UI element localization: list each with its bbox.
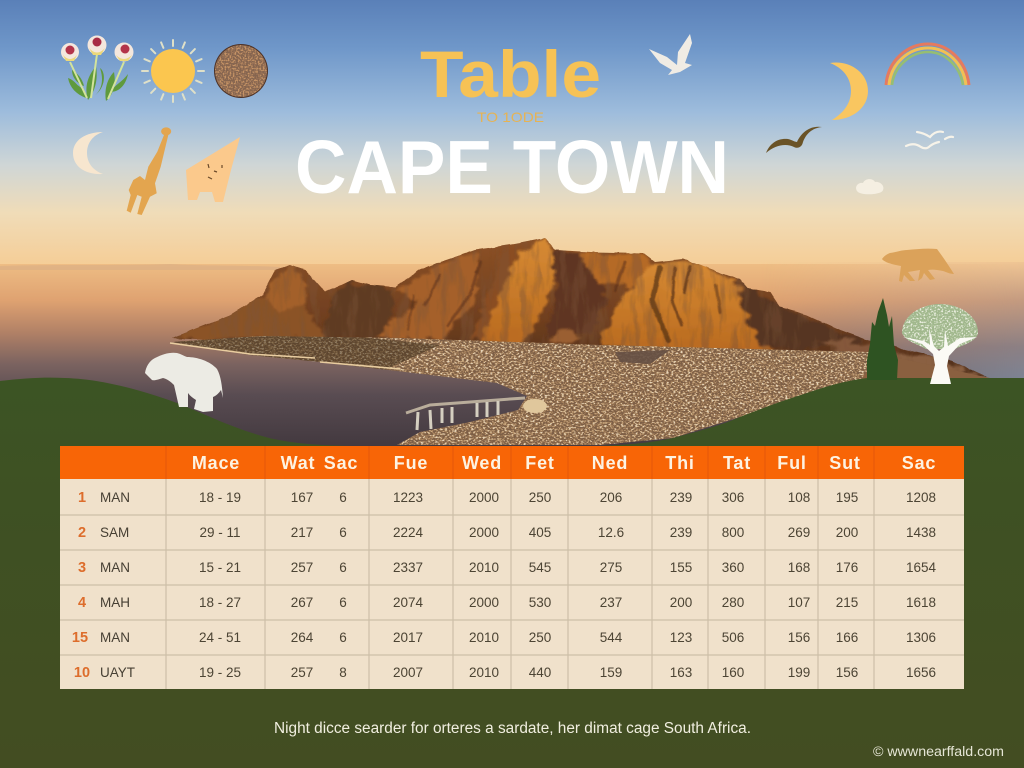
icon: rainbow <box>886 44 969 85</box>
sky background <box>0 0 1024 266</box>
icon: textured brown circle <box>214 44 268 98</box>
row 6: 8 <box>339 665 347 680</box>
row 6: 1656 <box>906 665 936 680</box>
row 1: 2000 <box>469 490 499 505</box>
green landscape <box>0 378 1024 768</box>
row 5: 544 <box>600 630 623 645</box>
icon: cypress tree <box>867 298 898 380</box>
row 1: 108 <box>788 490 810 505</box>
row 4: 2000 <box>469 595 499 610</box>
row 6 <box>74 665 936 681</box>
row 3: 2337 <box>393 560 423 575</box>
row 2: 6 <box>339 525 347 540</box>
row 3: 3 <box>78 560 86 576</box>
row 6: 159 <box>600 665 622 680</box>
small subtitle: TO 1ODE <box>477 109 544 125</box>
row 2: 29 - 11 <box>199 525 241 540</box>
row 4: MAH <box>100 595 130 610</box>
table header labels: Ful <box>777 453 807 473</box>
row 4: 215 <box>836 595 858 610</box>
icon: protea flowers <box>61 36 134 101</box>
footer caption: Night dicce searder for orteres a sardate, her dimat cage South Africa. <box>274 720 751 737</box>
table header labels: Wat <box>281 453 315 473</box>
table header labels: Thi <box>665 453 695 473</box>
row 6: 10 <box>74 665 90 681</box>
icon: rocket tower <box>127 127 171 215</box>
row 1: 1 <box>78 490 86 506</box>
row 5: 250 <box>529 630 551 645</box>
row 2 <box>78 525 936 541</box>
title line: Table: Table <box>420 37 601 111</box>
row 6: 156 <box>836 665 858 680</box>
table header labels: Tat <box>723 453 751 473</box>
row 3: 2010 <box>469 560 499 575</box>
icon: golden crescent moon <box>830 63 868 120</box>
row 2: 2224 <box>393 525 424 540</box>
row 5: 1306 <box>906 630 936 645</box>
row 2: 200 <box>836 525 858 540</box>
row 4: 18 - 27 <box>199 595 241 610</box>
row 3: 275 <box>600 560 622 575</box>
round harbour building <box>523 399 547 413</box>
table header labels: Sac <box>902 453 936 473</box>
table header labels: Fet <box>525 453 555 473</box>
icon: white baobab tree <box>902 304 978 384</box>
table header labels: Fue <box>394 453 428 473</box>
row 3: 545 <box>529 560 551 575</box>
data table <box>60 446 964 689</box>
row 2: 2000 <box>469 525 499 540</box>
icon: white dove <box>649 34 692 75</box>
row 3: 1654 <box>906 560 937 575</box>
row 1: 1223 <box>393 490 423 505</box>
row 4: 237 <box>600 595 622 610</box>
city of Cape Town <box>172 336 990 445</box>
table header labels <box>192 453 936 473</box>
row 2: SAM <box>100 525 129 540</box>
icon: walking animal silhouette <box>882 249 954 282</box>
row 4: 200 <box>670 595 692 610</box>
row 2: 1438 <box>906 525 936 540</box>
icon: small cloud <box>856 179 883 194</box>
table header background <box>60 446 964 479</box>
row 3 <box>78 560 937 576</box>
row 3: 155 <box>670 560 692 575</box>
icon: brown bird <box>766 127 822 153</box>
row 5 <box>72 630 936 646</box>
icon: paper house shape <box>186 137 240 202</box>
row 3: 168 <box>788 560 810 575</box>
row 5: 15 <box>72 630 88 646</box>
table header labels: Sut <box>829 453 861 473</box>
row 6: 2007 <box>393 665 423 680</box>
row 6: 199 <box>788 665 810 680</box>
row 1: 206 <box>600 490 622 505</box>
row 5: 156 <box>788 630 810 645</box>
table header labels: Mace <box>192 453 240 473</box>
row 4: 280 <box>722 595 744 610</box>
row 4: 2074 <box>393 595 424 610</box>
row 4: 267 <box>291 595 313 610</box>
row 4: 107 <box>788 595 810 610</box>
icon: white elephant <box>145 353 223 412</box>
row 4: 6 <box>339 595 347 610</box>
row 6: 2010 <box>469 665 499 680</box>
table header labels: Sac <box>324 453 358 473</box>
copyright: © wwwnearffald.com <box>873 744 1004 759</box>
row 1: 6 <box>339 490 347 505</box>
icon: sun <box>142 40 204 102</box>
row 2: 239 <box>670 525 692 540</box>
row 3: 6 <box>339 560 347 575</box>
row 2: 800 <box>722 525 744 540</box>
row 6: UAYT <box>100 665 135 680</box>
row 3: MAN <box>100 560 130 575</box>
row 1: 239 <box>670 490 692 505</box>
icon: white birds <box>906 132 953 148</box>
icon: pale crescent <box>73 132 103 174</box>
row 6: 163 <box>670 665 692 680</box>
row 2: 12.6 <box>598 525 624 540</box>
row 1 <box>78 490 936 506</box>
row 5: 6 <box>339 630 347 645</box>
row 5: 506 <box>722 630 744 645</box>
row 5: 166 <box>836 630 858 645</box>
harbour shoreline <box>170 343 400 369</box>
row 6: 160 <box>722 665 744 680</box>
row 3: 15 - 21 <box>199 560 241 575</box>
row 4: 530 <box>529 595 551 610</box>
row 1: 18 - 19 <box>199 490 241 505</box>
title <box>295 37 729 209</box>
row 6: 440 <box>529 665 551 680</box>
row 2: 405 <box>529 525 551 540</box>
row 5: MAN <box>100 630 130 645</box>
row 1: 1208 <box>906 490 936 505</box>
row 2: 2 <box>78 525 86 541</box>
row 5: 123 <box>670 630 692 645</box>
row 4: 4 <box>78 595 86 611</box>
row 5: 24 - 51 <box>199 630 241 645</box>
row 3: 176 <box>836 560 858 575</box>
row 5: 2010 <box>469 630 499 645</box>
table header labels: Wed <box>462 453 502 473</box>
row 1: 306 <box>722 490 744 505</box>
pier <box>406 398 525 430</box>
row 1: 250 <box>529 490 551 505</box>
row 1: MAN <box>100 490 130 505</box>
row 2: 269 <box>788 525 810 540</box>
row 1: 167 <box>291 490 313 505</box>
row 4 <box>78 595 936 611</box>
title line: Cape Town: CAPE TOWN <box>295 125 729 209</box>
row 2: 217 <box>291 525 313 540</box>
table header labels: Ned <box>592 453 628 473</box>
row 5: 2017 <box>393 630 423 645</box>
row 5: 264 <box>291 630 314 645</box>
row 3: 257 <box>291 560 313 575</box>
sea and horizon <box>0 262 1024 446</box>
row 1: 195 <box>836 490 858 505</box>
row 3: 360 <box>722 560 744 575</box>
Table Mountain <box>172 238 987 377</box>
row 6: 19 - 25 <box>199 665 241 680</box>
grid lines <box>60 479 964 689</box>
table body background <box>60 479 964 689</box>
row 4: 1618 <box>906 595 936 610</box>
row 6: 257 <box>291 665 313 680</box>
